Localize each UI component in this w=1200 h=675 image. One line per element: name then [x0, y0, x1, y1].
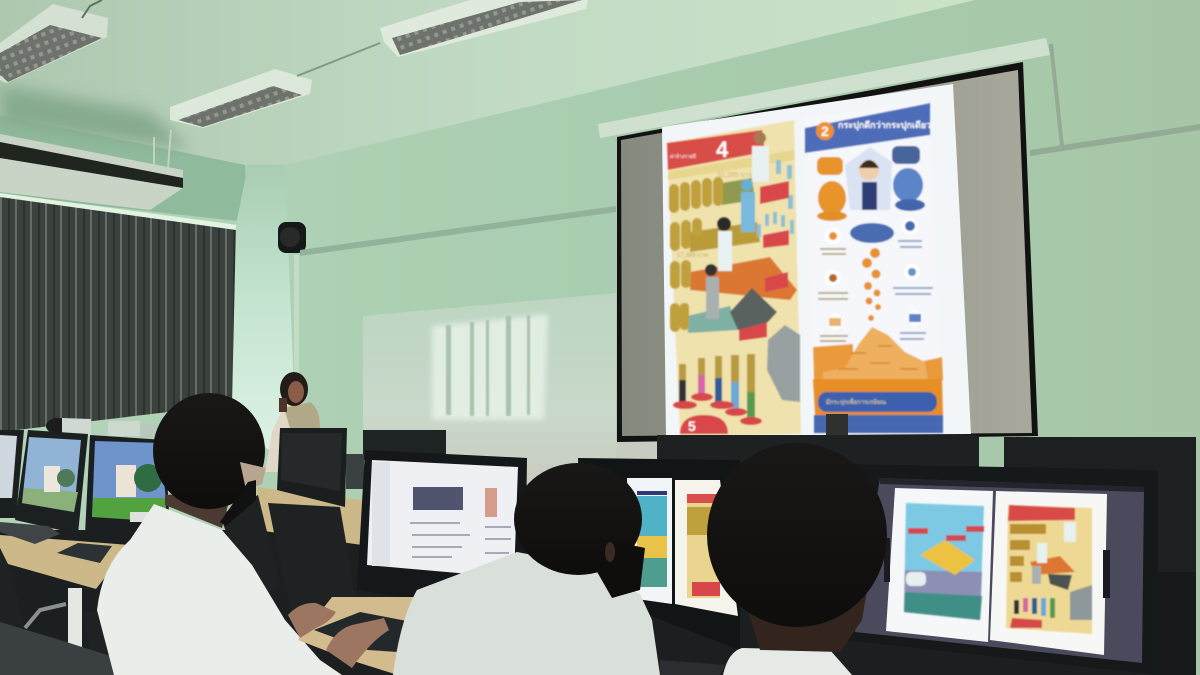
curtain blinds [0, 193, 238, 432]
presenter figure and building [845, 147, 892, 210]
rear dark monitors beside presenter [46, 418, 446, 489]
desk behind chairs [257, 487, 362, 545]
wall speaker [278, 222, 306, 253]
centre monitor with social page [357, 450, 527, 602]
side page controls [884, 538, 890, 582]
office chairs [0, 495, 356, 675]
projected infographic: right panel [805, 100, 943, 433]
blue title banner: กระปุกดีกว่ากระปุกเดียว [838, 120, 931, 131]
blue title banner: 2 [821, 123, 829, 139]
middle monitor with two pages [578, 458, 740, 650]
hair [153, 393, 265, 509]
presenter [265, 372, 320, 472]
left side wall [0, 115, 248, 222]
red salary tags [739, 181, 789, 341]
red badge 5: 5 [688, 418, 696, 434]
falling coins [862, 248, 881, 321]
lower keyboard [660, 660, 725, 675]
desk left [0, 535, 130, 589]
banner: red headline: ค่าจ้างรายปี [670, 153, 696, 160]
side icons with text [818, 218, 933, 342]
monitor far left [0, 430, 24, 518]
blue footer strip [814, 415, 943, 433]
conduit on wall [294, 255, 299, 375]
lower wall behind monitors [527, 440, 657, 530]
coin rows and steps [668, 150, 797, 333]
shirt [723, 648, 852, 675]
infographic thumbnail left [904, 503, 984, 620]
back row monitors behind screen [657, 435, 1196, 675]
ceiling light fixtures [0, 0, 588, 128]
shadow on ceiling above air conditioner [0, 85, 190, 150]
projection screen [617, 62, 1038, 442]
page thumb left [637, 491, 667, 587]
banner: red headline: 4 [716, 137, 729, 162]
student right [707, 443, 887, 675]
black monitor near presenter [277, 428, 347, 507]
pointer box at screen base [826, 414, 848, 436]
keyboards [0, 522, 112, 563]
neck and cheek [745, 560, 872, 652]
five bar columns of coins with figures [673, 354, 762, 425]
monitor third with building wallpaper [85, 435, 170, 534]
shirt [97, 504, 342, 675]
page right [990, 491, 1107, 655]
coin rows and steps: 17,389 บาท [677, 253, 708, 259]
chair base [25, 604, 66, 628]
window light column [232, 165, 295, 450]
front chair back [0, 622, 170, 675]
wall rail right [1030, 44, 1200, 156]
glasses and cheek [240, 462, 266, 490]
mask [220, 480, 256, 526]
crowd of small figures [730, 288, 800, 402]
banner: red headline [667, 130, 765, 170]
keyboard centre [314, 612, 412, 652]
air conditioner [0, 130, 183, 210]
infographic thumbnail right [1006, 505, 1092, 634]
projector screen housing [598, 38, 1050, 138]
central pedestal [850, 223, 894, 243]
blue footer message pill [818, 392, 937, 412]
gold pile and orange base [813, 327, 943, 416]
top toolbar [880, 478, 1144, 492]
orange piggy bank [817, 157, 847, 221]
student middle [393, 463, 660, 675]
projected infographic: left panel [667, 120, 801, 436]
neck [165, 490, 232, 528]
blue title banner [805, 103, 931, 153]
hair [707, 443, 887, 627]
red badge 5 [680, 415, 728, 434]
small staff figures at right [757, 160, 794, 237]
coin rows and steps: 32,285 บาท [717, 172, 754, 179]
staff figures [705, 132, 769, 319]
student left [97, 393, 342, 675]
desk centre [298, 597, 425, 675]
ceiling [0, 0, 975, 165]
page left [886, 488, 993, 642]
large monitor right [844, 464, 1158, 675]
page thumb right [687, 494, 720, 598]
whiteboard [363, 293, 616, 478]
monitor second with building wallpaper [15, 430, 88, 534]
student hands on keyboard [288, 603, 389, 668]
wall rail left [300, 206, 616, 256]
desk leg [68, 588, 82, 650]
floor and under-desk shadow [0, 530, 1196, 675]
blue footer message pill: มีกระปุกเพื่อการเกษียณ [826, 398, 886, 406]
blue piggy bank [892, 146, 925, 211]
